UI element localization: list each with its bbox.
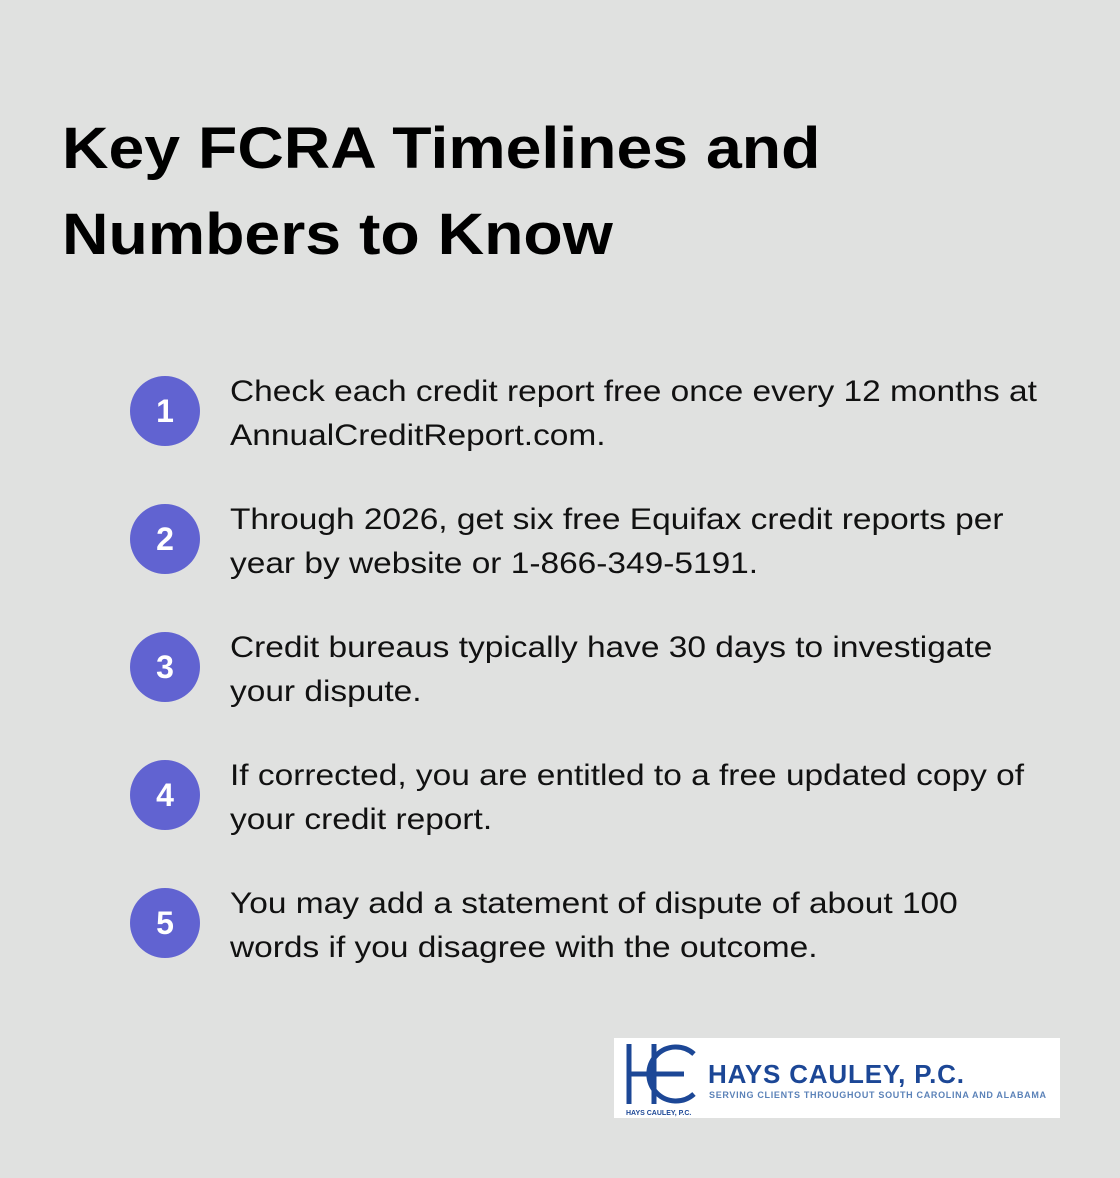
item 5: words if you disagree with the outcome.	[230, 931, 818, 964]
item 2: 2	[156, 521, 174, 557]
item 5	[130, 887, 958, 964]
item 1: 1	[156, 393, 174, 429]
item 3: 3	[156, 649, 174, 685]
item 5: You may add a statement of dispute of about 100	[230, 887, 958, 920]
title: Key FCRA Timelines and	[62, 116, 820, 181]
item 2	[130, 503, 1003, 580]
logo: HAYS CAULEY, P.C.	[626, 1110, 691, 1117]
item 4: your credit report.	[230, 803, 492, 836]
item 4: 4	[156, 777, 174, 813]
logo: HAYS CAULEY, P.C.	[708, 1059, 964, 1089]
logo	[614, 1038, 1060, 1118]
icon: HC monogram	[629, 1044, 694, 1104]
title: Numbers to Know	[62, 202, 613, 267]
item 1: Check each credit report free once every 12 months at	[230, 375, 1037, 408]
item 5: 5	[156, 905, 174, 941]
item 2: year by website or 1-866-349-5191.	[230, 547, 758, 580]
item 3: Credit bureaus typically have 30 days to investigate	[230, 631, 992, 664]
item 3: your dispute.	[230, 675, 422, 708]
item 4	[130, 759, 1024, 836]
item 4: If corrected, you are entitled to a free updated copy of	[230, 759, 1024, 792]
item 2: Through 2026, get six free Equifax credit reports per	[230, 503, 1003, 536]
logo: SERVING CLIENTS THROUGHOUT SOUTH CAROLINA AND ALABAMA	[709, 1090, 1046, 1100]
item 3	[130, 631, 992, 708]
item 1	[130, 375, 1037, 452]
title	[62, 116, 820, 267]
item 1: AnnualCreditReport.com.	[230, 419, 606, 452]
